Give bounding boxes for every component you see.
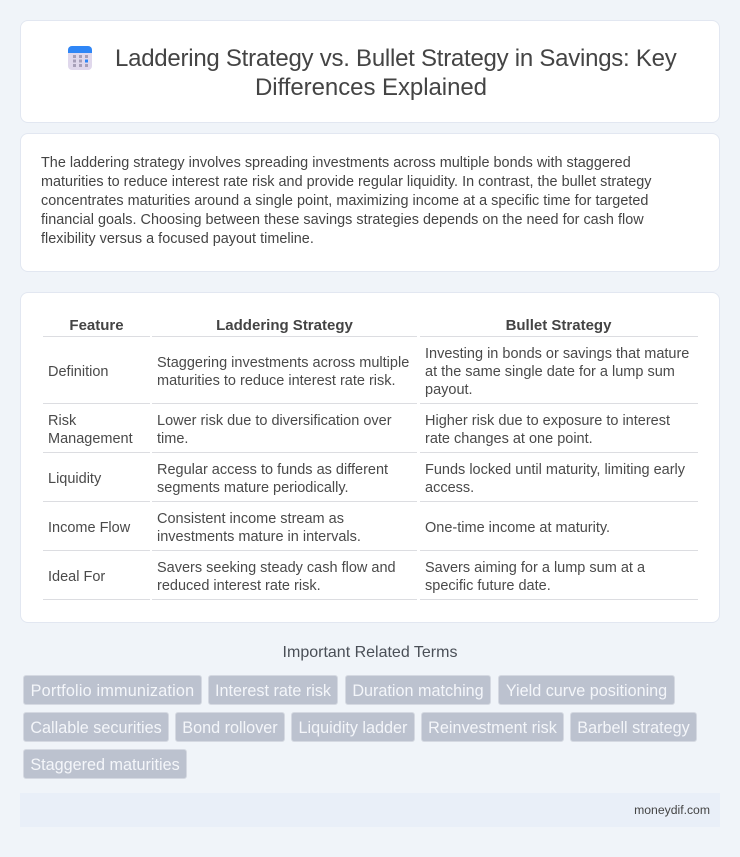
intro text <box>41 155 652 247</box>
intro text: The laddering strategy involves spreading investments across multiple bonds with staggered <box>41 155 631 171</box>
related terms heading: Important Related Terms <box>283 644 457 661</box>
footer bar <box>20 793 720 827</box>
row: liquidity: segments mature periodically. <box>157 480 349 496</box>
intro text: flexibility versus a focused payout timeline. <box>41 231 314 247</box>
row: ideal for: reduced interest rate risk. <box>157 578 321 594</box>
title <box>115 45 677 101</box>
intro text: maturities to reduce interest rate risk and provide regular liquidity. In contrast, the bullet strategy <box>41 174 652 190</box>
row: definition: Investing in bonds or savings that mature <box>425 346 689 362</box>
row: risk management <box>43 413 698 453</box>
row: risk management: Lower risk due to diversification over <box>157 413 392 429</box>
related terms tags: Bond rollover <box>182 719 278 737</box>
row: income flow: One-time income at maturity. <box>425 520 610 536</box>
row: income flow: Income Flow <box>48 520 130 536</box>
row: income flow: Consistent income stream as <box>157 511 344 527</box>
row: liquidity: Liquidity <box>48 471 101 487</box>
related terms tags: Yield curve positioning <box>506 682 667 700</box>
related terms tags: Reinvestment risk <box>428 719 557 737</box>
row: liquidity: Funds locked until maturity, limiting early <box>425 462 685 478</box>
row: liquidity: access. <box>425 480 474 496</box>
table header: Laddering Strategy <box>216 317 353 334</box>
row: ideal for: specific future date. <box>425 578 551 594</box>
intro text: financial goals. Choosing between these savings strategies depends on the need for cash flow <box>41 212 644 228</box>
related terms tags: Staggered maturities <box>30 756 180 774</box>
row: definition: at the same single date for a lump sum <box>425 364 675 380</box>
row: income flow: investments mature in intervals. <box>157 529 361 545</box>
row: risk management: time. <box>157 431 188 447</box>
related terms tags: Barbell strategy <box>577 719 690 737</box>
intro card <box>20 133 720 272</box>
related terms tags: Duration matching <box>352 682 484 700</box>
title: Differences Explained <box>255 74 487 101</box>
footer source: moneydif.com <box>634 803 710 817</box>
related terms tags: Liquidity ladder <box>299 719 407 737</box>
row: ideal for <box>43 560 698 600</box>
row: liquidity: Regular access to funds as different <box>157 462 388 478</box>
related terms tags <box>23 675 697 779</box>
comparison table card <box>20 292 720 623</box>
row: risk management: Management <box>48 431 133 447</box>
title card <box>20 20 720 123</box>
table header <box>43 317 698 337</box>
row: liquidity <box>43 462 698 502</box>
row: risk management: Risk <box>48 413 76 429</box>
related terms tags: Interest rate risk <box>215 682 331 700</box>
row: definition: maturities to reduce interest rate risk. <box>157 373 396 389</box>
row: definition: Staggering investments across multiple <box>157 355 409 371</box>
row: risk management: rate changes at one point. <box>425 431 593 447</box>
intro text: concentrates maturities around a single point, maximizing income at a specific time for targeted <box>41 193 648 209</box>
table header: Bullet Strategy <box>506 317 611 334</box>
row: definition: payout. <box>425 382 473 398</box>
row: income flow <box>43 511 698 551</box>
row: risk management: Higher risk due to exposure to interest <box>425 413 670 429</box>
related terms tags: Callable securities <box>30 719 162 737</box>
row: ideal for: Ideal For <box>48 569 105 585</box>
row: ideal for: Savers aiming for a lump sum at a <box>425 560 645 576</box>
row: definition <box>43 346 698 404</box>
table header: Feature <box>69 317 124 334</box>
related terms tags: Portfolio immunization <box>31 682 194 700</box>
icon: calendar <box>68 46 92 70</box>
title: Laddering Strategy vs. Bullet Strategy in Savings: Key <box>115 45 676 72</box>
row: ideal for: Savers seeking steady cash flow and <box>157 560 396 576</box>
row: definition: Definition <box>48 364 108 380</box>
